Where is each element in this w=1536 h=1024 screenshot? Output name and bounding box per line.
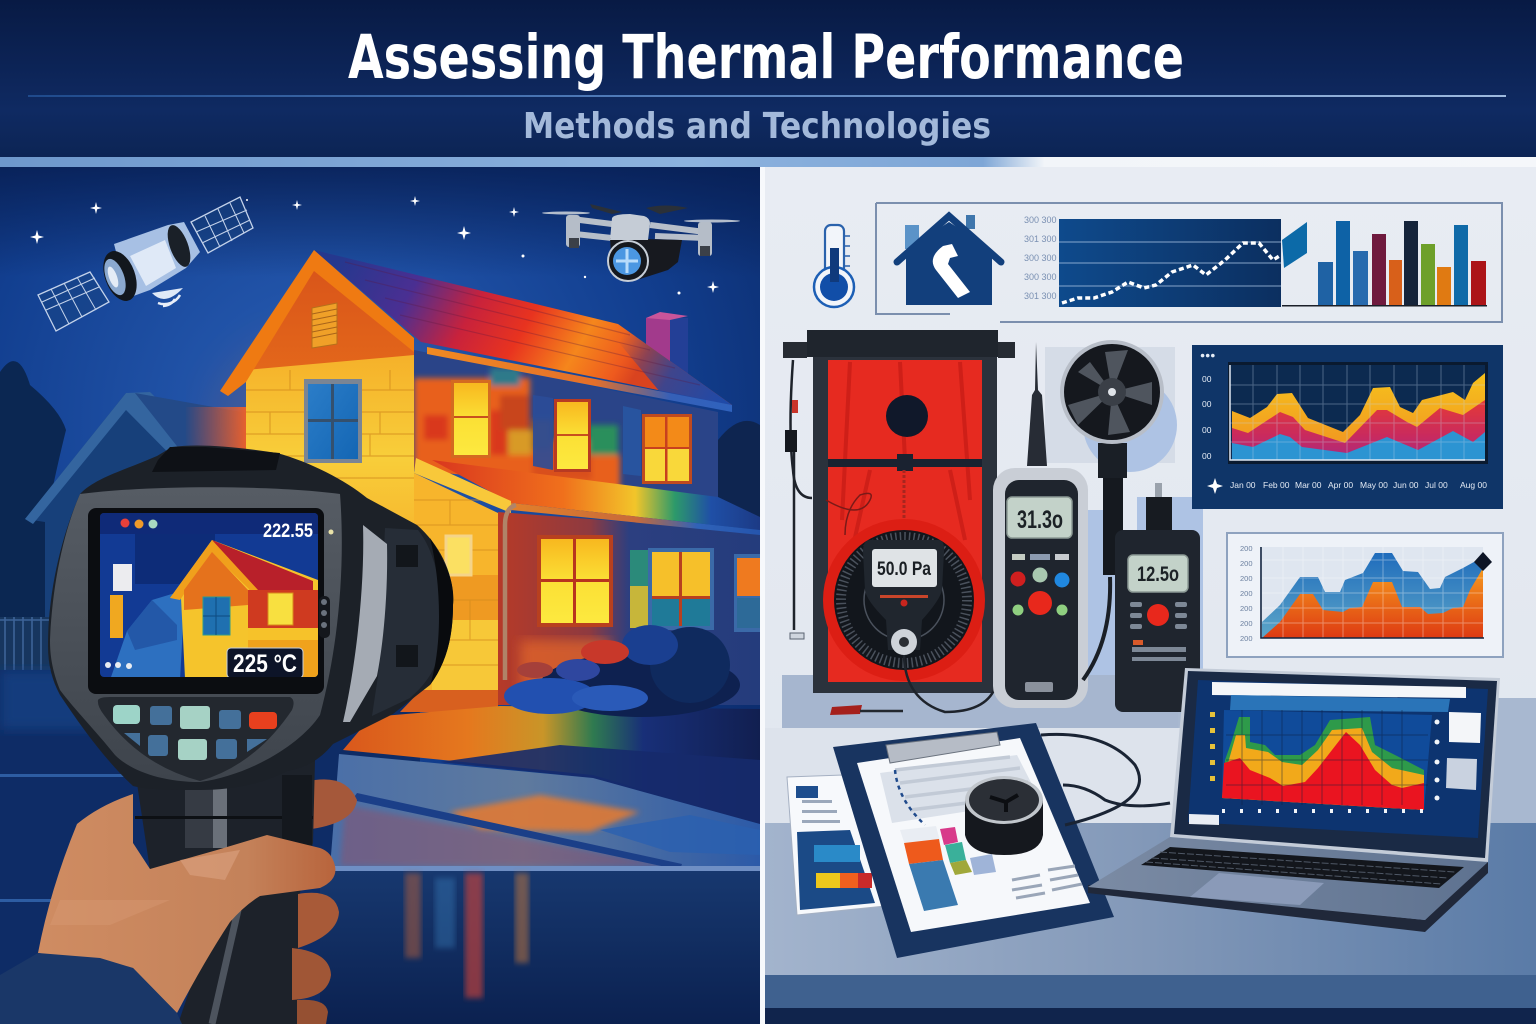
laptop base [1088,860,1488,932]
axis labels: 300 300 [1024,253,1057,263]
heat glow around house [210,330,450,510]
blower door [783,330,1015,715]
lower window [648,548,714,630]
heat map chart [1222,710,1432,810]
chart labels: Mar 00 [1295,480,1322,490]
axis labels: 301 300 [1024,291,1057,301]
upper blue window [304,379,362,463]
chart labels [1240,544,1253,643]
chart labels: Apr 00 [1328,480,1353,490]
fascia strip [427,347,732,412]
hanging probe [785,360,812,639]
clipboard [833,723,1114,958]
chart labels: 200 [1240,589,1253,598]
chart labels: 00 [1202,451,1212,461]
fan ring [823,519,985,681]
axis labels [1024,215,1057,301]
icon: drone [542,204,740,281]
window [554,399,591,472]
title: Assessing Thermal Performance [348,22,1184,93]
stars [30,196,719,294]
report content [895,757,1082,911]
lower ground [0,670,420,1024]
keypad [98,697,294,781]
foundation strip [400,690,498,712]
header divider band [0,157,1536,167]
neighbouring house [0,392,260,672]
chimney [646,312,688,390]
small gable window [446,536,471,575]
lawn [343,706,760,824]
lower window [734,554,760,632]
chart labels: 00 [1202,374,1212,384]
laptop [1088,668,1500,932]
chart labels: 200 [1240,574,1253,583]
red tag [830,705,862,715]
stacked area chart panel [1192,345,1503,509]
upper side wall [414,350,718,500]
finger behind grip [305,779,357,830]
dark lawn lower edge [440,745,760,824]
axis labels: 300 300 [1024,215,1057,225]
barrel section [372,528,442,716]
panel: field thermal imaging scene [0,167,760,1024]
handheld meter [1115,483,1200,712]
chart labels: ●●● [1200,350,1215,360]
thermal house [220,250,760,705]
chart labels: 00 [1202,399,1212,409]
camera body [48,445,453,790]
chart labels: Aug 00 [1460,480,1487,490]
pressure cable [904,655,995,712]
top data panel [876,203,1502,322]
screen reading: 222.55 [263,521,313,542]
multimeter handheld [993,342,1088,708]
chart labels: May 00 [1360,480,1388,490]
side indicator dots [319,596,330,638]
chart labels: 200 [1240,559,1253,568]
attic vent [312,303,337,348]
fence [0,617,50,672]
camera screen [100,513,318,680]
chart axis dots [1222,809,1428,813]
subtitle: Methods and Technologies [523,106,991,147]
chart labels: Jun 00 [1393,480,1419,490]
laptop lid [1170,668,1500,862]
chart labels: 200 [1240,634,1253,643]
front gable wall [246,268,414,560]
chart labels: 200 [1240,619,1253,628]
sensor puck [965,776,1043,855]
chart labels: Jul 00 [1425,480,1448,490]
blue shadow behind instruments [1083,378,1203,675]
chart labels: 200 [1240,544,1253,553]
window [642,414,692,484]
sensor cable [1041,734,1170,825]
trees at right [718,421,760,525]
chart labels: Jan 00 [1230,480,1256,490]
lower main wall [498,512,760,705]
panel: instruments and data [760,167,1536,1024]
chart labels [1200,350,1487,490]
window [451,380,491,458]
drain pipe [505,505,516,680]
icon: thermometer [814,225,854,307]
icon: house [897,215,1001,305]
camera grip [135,760,315,1024]
icon: satellite [38,197,253,331]
shrubs [504,625,740,717]
lower gable wall [414,473,498,690]
meter reading: 12.5o [1137,563,1179,586]
yellow eave [414,458,511,513]
porch roof [432,460,760,530]
pointer flag [1282,222,1307,268]
shelf surface [765,675,1536,1024]
pressure gauge [863,540,944,655]
chart labels: Feb 00 [1263,480,1290,490]
screen bezel [88,508,324,694]
main roof [314,250,732,405]
grey stripe [343,525,387,722]
thermal camera [48,445,453,1024]
sleeve [0,953,182,1024]
chart labels: 200 [1240,604,1253,613]
area chart panel [1227,533,1503,657]
orange gable roof edge [220,250,414,396]
meter reading: 31.3o [1017,506,1063,534]
pressure gauge: 50.0 Pa [877,559,931,580]
document sheet [787,775,895,915]
axis labels: 301 300 [1024,234,1057,244]
axis labels: 300 300 [1024,272,1057,282]
hand holding camera [0,794,339,1024]
face plate [50,487,342,782]
clip [886,732,1000,763]
barrel front [430,538,453,685]
bar chart [1282,221,1487,306]
trees at left [0,361,66,630]
anemometer [1060,340,1164,680]
anemometer backing panel [1045,347,1175,463]
lower window [537,535,613,627]
temperature reading: 225 °C [233,650,297,678]
line chart [1024,215,1281,307]
chart labels: 00 [1202,425,1212,435]
pavement and reflections [320,754,760,1024]
header banner [0,0,1536,158]
